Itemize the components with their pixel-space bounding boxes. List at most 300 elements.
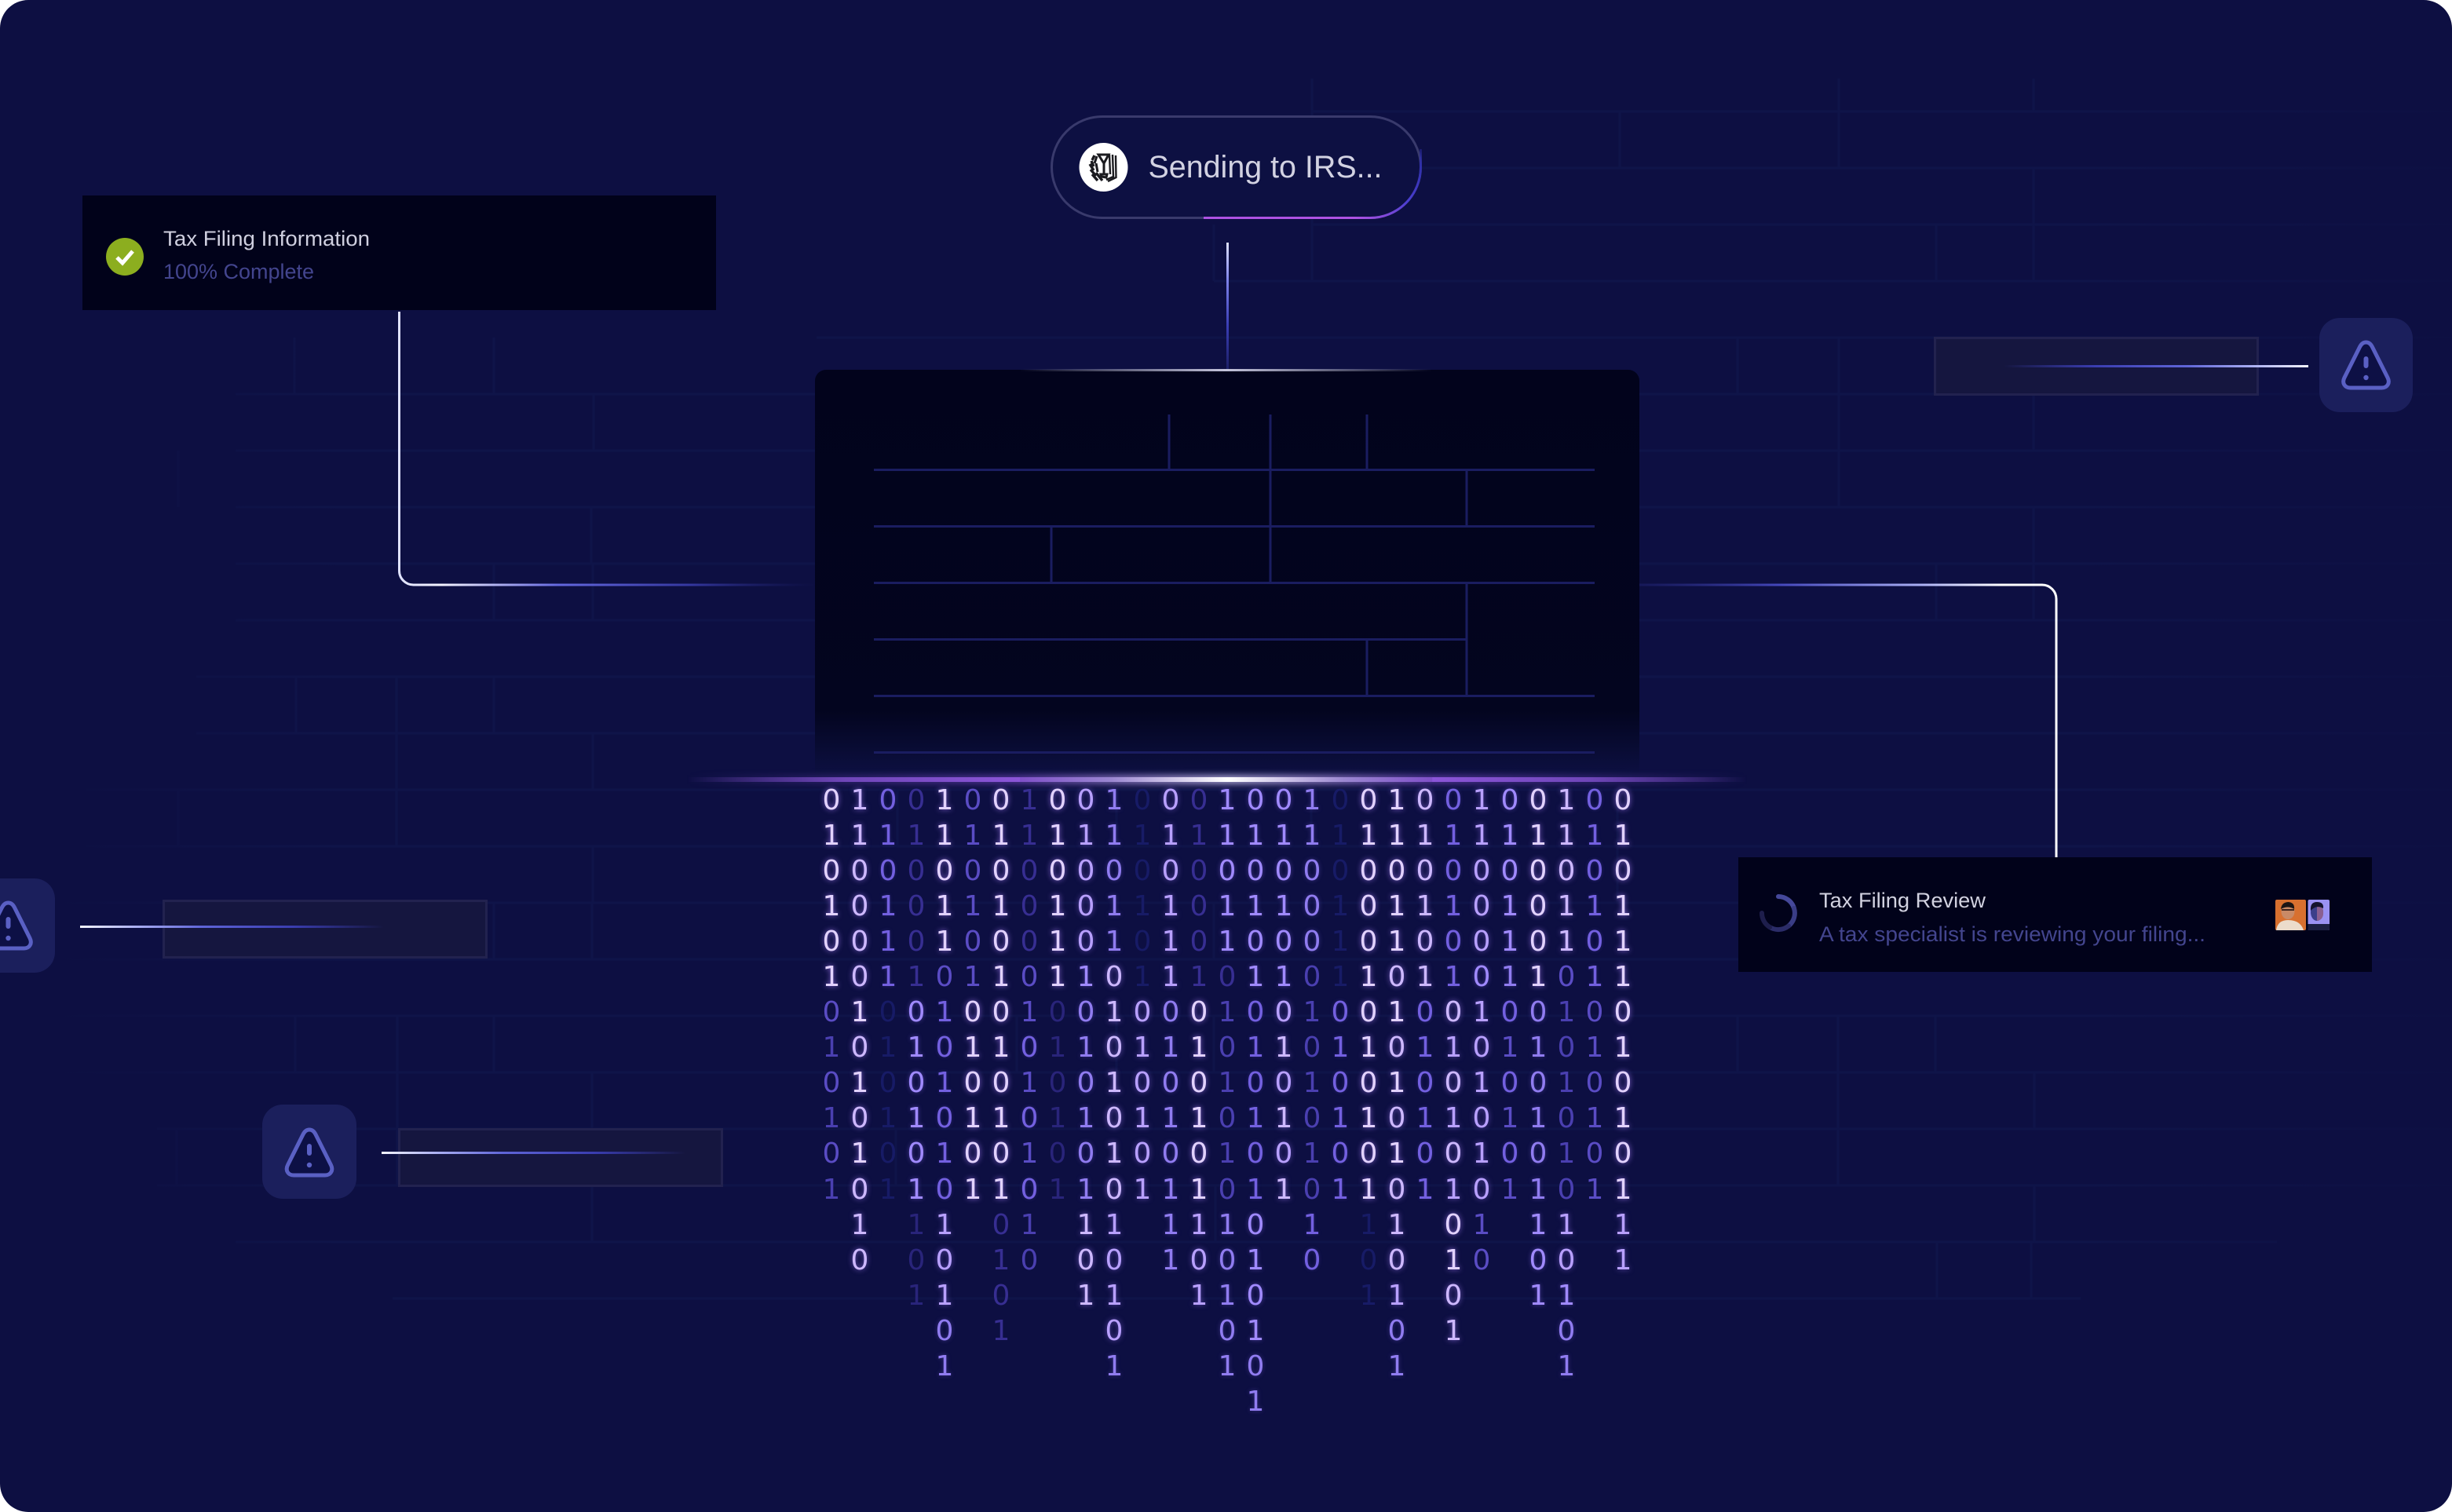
- binary data stream: 1: [1501, 1102, 1518, 1134]
- binary data stream: 0: [1501, 855, 1518, 887]
- binary data stream: 1: [1558, 1138, 1575, 1170]
- binary data stream: 0: [1190, 784, 1208, 816]
- binary data stream: 0: [1501, 784, 1518, 816]
- binary data stream: 0: [1219, 1315, 1236, 1347]
- binary data stream: 0: [1558, 1244, 1575, 1276]
- binary data stream: 0: [1529, 784, 1547, 816]
- binary data stream: 0: [936, 1032, 953, 1064]
- binary data stream: 1: [1049, 890, 1066, 922]
- binary data stream: 0: [992, 784, 1010, 816]
- binary data stream: 0: [1162, 784, 1179, 816]
- binary data stream: 0: [1360, 855, 1377, 887]
- binary data stream: 0: [936, 1174, 953, 1206]
- binary data stream: 1: [1445, 820, 1462, 852]
- binary data stream: 1: [1416, 890, 1434, 922]
- binary data stream: 1: [936, 1350, 953, 1382]
- card title: Tax Filing Review: [1819, 889, 1986, 912]
- binary data stream: 0: [1360, 784, 1377, 816]
- binary data stream: 0: [1190, 855, 1208, 887]
- binary data stream: 1: [823, 1174, 840, 1206]
- binary data stream: 0: [823, 855, 840, 887]
- binary data stream: 0: [1275, 1138, 1292, 1170]
- binary data stream: 0: [1021, 855, 1038, 887]
- binary data stream: 1: [1219, 996, 1236, 1028]
- binary data stream: 1: [936, 890, 953, 922]
- binary data stream: 1: [1558, 784, 1575, 816]
- binary data stream: 0: [851, 1244, 868, 1276]
- binary data stream: 1: [851, 820, 868, 852]
- binary data stream: 0: [1247, 996, 1264, 1028]
- binary data stream: 1: [1162, 820, 1179, 852]
- binary data stream: 0: [1416, 1067, 1434, 1099]
- connector: pill to panel: [1226, 243, 1229, 370]
- binary data stream: 0: [1190, 1244, 1208, 1276]
- binary data stream: 0: [1219, 961, 1236, 993]
- binary data stream: 1: [879, 890, 897, 922]
- binary data stream: 1: [908, 1032, 925, 1064]
- binary data stream: 0: [1473, 855, 1490, 887]
- binary data stream: 1: [1275, 1174, 1292, 1206]
- scanner bar: [687, 777, 1747, 782]
- binary data stream: [820, 784, 1634, 1418]
- binary data stream: 1: [1416, 1174, 1434, 1206]
- binary data stream: 1: [879, 1102, 897, 1134]
- binary data stream: 1: [1275, 1032, 1292, 1064]
- binary data stream: 0: [1416, 855, 1434, 887]
- binary data stream: 1: [936, 1138, 953, 1170]
- binary data stream: 0: [1332, 1138, 1349, 1170]
- binary data stream: 0: [908, 890, 925, 922]
- binary data stream: 0: [1105, 961, 1123, 993]
- binary data stream: 1: [1275, 890, 1292, 922]
- placeholder bar: left: [163, 900, 488, 959]
- binary data stream: 0: [1021, 890, 1038, 922]
- binary data stream: 1: [1360, 961, 1377, 993]
- binary data stream: 0: [1247, 1350, 1264, 1382]
- binary data stream: 0: [1247, 1138, 1264, 1170]
- binary data stream: 1: [908, 1280, 925, 1312]
- binary data stream: 1: [1388, 1138, 1405, 1170]
- binary data stream: 0: [1162, 996, 1179, 1028]
- binary data stream: 1: [1021, 784, 1038, 816]
- binary data stream: 0: [1105, 1032, 1123, 1064]
- binary data stream: 1: [1162, 1102, 1179, 1134]
- binary data stream: 0: [1134, 926, 1151, 958]
- binary data stream: 1: [1247, 1244, 1264, 1276]
- binary data stream: 1: [1105, 1067, 1123, 1099]
- binary data stream: 0: [851, 890, 868, 922]
- icon: spinner: [1762, 897, 1795, 929]
- binary data stream: 1: [936, 996, 953, 1028]
- binary data stream: 1: [1614, 890, 1632, 922]
- alert icon: lower left: [262, 1105, 356, 1199]
- binary data stream: 0: [1586, 855, 1603, 887]
- binary data stream: 0: [1134, 1067, 1151, 1099]
- binary data stream: 0: [992, 855, 1010, 887]
- binary data stream: 0: [1247, 926, 1264, 958]
- binary data stream: 0: [1219, 1174, 1236, 1206]
- binary data stream: 0: [1558, 855, 1575, 887]
- binary data stream: 1: [1134, 961, 1151, 993]
- binary data stream: 0: [1021, 1102, 1038, 1134]
- binary data stream: 1: [1360, 820, 1377, 852]
- alert line: right: [2004, 365, 2308, 367]
- binary data stream: 1: [964, 1102, 981, 1134]
- binary data stream: 0: [908, 1244, 925, 1276]
- binary data stream: 0: [936, 1244, 953, 1276]
- binary data stream: 1: [823, 1102, 840, 1134]
- binary data stream: 0: [1473, 890, 1490, 922]
- card: Tax Filing Review: [1738, 857, 2372, 972]
- binary data stream: 0: [851, 1102, 868, 1134]
- binary data stream: 0: [1445, 1067, 1462, 1099]
- binary data stream: 1: [992, 1174, 1010, 1206]
- binary data stream: 0: [964, 784, 981, 816]
- binary data stream: 1: [1219, 926, 1236, 958]
- binary data stream: 1: [1501, 1032, 1518, 1064]
- binary data stream: 1: [1332, 1174, 1349, 1206]
- binary data stream: 1: [1162, 926, 1179, 958]
- binary data stream: 0: [1162, 1138, 1179, 1170]
- binary data stream: 1: [1134, 1032, 1151, 1064]
- binary data stream: 1: [1614, 1209, 1632, 1241]
- binary data stream: 0: [1473, 1102, 1490, 1134]
- binary data stream: 0: [992, 1209, 1010, 1241]
- binary data stream: 1: [936, 926, 953, 958]
- binary data stream: 0: [1049, 996, 1066, 1028]
- binary data stream: 1: [1360, 1209, 1377, 1241]
- binary data stream: 1: [1445, 1244, 1462, 1276]
- binary data stream: 1: [1558, 1350, 1575, 1382]
- binary data stream: 0: [964, 926, 981, 958]
- binary data stream: 0: [1303, 1244, 1321, 1276]
- binary data stream: 1: [1021, 1138, 1038, 1170]
- binary data stream: 0: [1049, 1067, 1066, 1099]
- binary data stream: 1: [823, 890, 840, 922]
- binary data stream: 1: [1529, 961, 1547, 993]
- binary data stream: 1: [1388, 926, 1405, 958]
- binary data stream: 1: [851, 784, 868, 816]
- binary data stream: 0: [1614, 784, 1632, 816]
- binary data stream: 0: [1360, 1244, 1377, 1276]
- binary data stream: 0: [1077, 784, 1094, 816]
- binary data stream: 0: [1445, 855, 1462, 887]
- binary data stream: 0: [1360, 890, 1377, 922]
- binary data stream: 1: [1219, 890, 1236, 922]
- binary data stream: 1: [1501, 961, 1518, 993]
- binary data stream: 0: [1445, 1280, 1462, 1312]
- binary data stream: 1: [1303, 996, 1321, 1028]
- binary data stream: 1: [1416, 961, 1434, 993]
- binary data stream: 0: [1303, 1102, 1321, 1134]
- binary data stream: 1: [1332, 890, 1349, 922]
- binary data stream: 0: [936, 1102, 953, 1134]
- binary data stream: 1: [1247, 820, 1264, 852]
- binary data stream: 1: [1473, 820, 1490, 852]
- binary data stream: 0: [1388, 1244, 1405, 1276]
- binary data stream: 0: [908, 1138, 925, 1170]
- binary data stream: 1: [1473, 1067, 1490, 1099]
- binary data stream: 0: [1558, 1174, 1575, 1206]
- binary data stream: 1: [1049, 961, 1066, 993]
- binary data stream: 0: [1529, 890, 1547, 922]
- binary data stream: 0: [1473, 1032, 1490, 1064]
- binary data stream: 1: [1105, 1350, 1123, 1382]
- binary data stream: 1: [1388, 1067, 1405, 1099]
- binary data stream: 1: [1190, 820, 1208, 852]
- binary data stream: 0: [1473, 926, 1490, 958]
- binary data stream: 1: [1105, 996, 1123, 1028]
- binary data stream: 0: [1558, 1032, 1575, 1064]
- panel: encrypted document: [815, 370, 1639, 776]
- binary data stream: 0: [1360, 1067, 1377, 1099]
- binary data stream: 0: [964, 1067, 981, 1099]
- binary data stream: 0: [1473, 1174, 1490, 1206]
- binary data stream: 1: [908, 1174, 925, 1206]
- binary data stream: 1: [1247, 890, 1264, 922]
- binary data stream: 0: [1303, 926, 1321, 958]
- binary data stream: 1: [1247, 961, 1264, 993]
- binary data stream: 0: [908, 1067, 925, 1099]
- binary data stream: 1: [1558, 926, 1575, 958]
- binary data stream: 0: [1558, 1315, 1575, 1347]
- binary data stream: 0: [1021, 926, 1038, 958]
- binary data stream: 0: [936, 1315, 953, 1347]
- binary data stream: 1: [992, 1244, 1010, 1276]
- binary data stream: 1: [1021, 996, 1038, 1028]
- binary data stream: 0: [1416, 996, 1434, 1028]
- binary data stream: 0: [992, 1067, 1010, 1099]
- binary data stream: 0: [1529, 1138, 1547, 1170]
- alert line: lower left: [382, 1152, 685, 1154]
- binary data stream: 1: [1134, 1174, 1151, 1206]
- binary data stream: 0: [1190, 1138, 1208, 1170]
- binary data stream: 1: [879, 1174, 897, 1206]
- binary data stream: 1: [1416, 820, 1434, 852]
- binary data stream: 0: [1134, 855, 1151, 887]
- binary data stream: 1: [823, 820, 840, 852]
- binary data stream: 0: [1303, 1032, 1321, 1064]
- scanner bar glow: [687, 775, 1747, 784]
- binary data stream: 1: [936, 1209, 953, 1241]
- binary data stream: 0: [1021, 1032, 1038, 1064]
- binary data stream: 1: [1529, 1174, 1547, 1206]
- binary data stream: 0: [879, 1138, 897, 1170]
- binary data stream: 0: [1134, 996, 1151, 1028]
- binary data stream: 0: [1473, 961, 1490, 993]
- binary data stream: 0: [964, 855, 981, 887]
- binary data stream: 0: [879, 996, 897, 1028]
- binary data stream: 0: [1445, 1209, 1462, 1241]
- binary data stream: 0: [1247, 1209, 1264, 1241]
- binary data stream: 0: [1077, 1138, 1094, 1170]
- binary data stream: 1: [1049, 820, 1066, 852]
- binary data stream: 1: [1190, 1032, 1208, 1064]
- binary data stream: 1: [1529, 1032, 1547, 1064]
- binary data stream: 1: [1529, 1280, 1547, 1312]
- binary data stream: 0: [879, 784, 897, 816]
- binary data stream: 0: [1303, 890, 1321, 922]
- binary data stream: 1: [1473, 996, 1490, 1028]
- placeholder bar: lower left: [398, 1128, 723, 1187]
- binary data stream: 1: [1219, 1209, 1236, 1241]
- binary data stream: 1: [1332, 1102, 1349, 1134]
- binary data stream: 1: [1388, 1209, 1405, 1241]
- binary data stream: 1: [992, 961, 1010, 993]
- binary data stream: 1: [1105, 784, 1123, 816]
- binary data stream: 0: [851, 1174, 868, 1206]
- avatars: [2275, 900, 2330, 930]
- binary data stream: 1: [1077, 1032, 1094, 1064]
- binary data stream: 0: [1388, 1032, 1405, 1064]
- binary data stream: 1: [1558, 820, 1575, 852]
- binary data stream: 1: [1614, 926, 1632, 958]
- binary data stream: 0: [1134, 1138, 1151, 1170]
- binary data stream: 1: [936, 1280, 953, 1312]
- binary data stream: 1: [1388, 820, 1405, 852]
- binary data stream: 1: [1473, 784, 1490, 816]
- binary data stream: 1: [879, 1032, 897, 1064]
- binary data stream: 0: [823, 926, 840, 958]
- binary data stream: 1: [1445, 1102, 1462, 1134]
- binary data stream: 1: [1077, 961, 1094, 993]
- binary data stream: 1: [1445, 1174, 1462, 1206]
- binary data stream: 0: [1501, 1138, 1518, 1170]
- binary data stream: 1: [1303, 1209, 1321, 1241]
- binary data stream: 0: [1303, 1174, 1321, 1206]
- binary data stream: 0: [908, 926, 925, 958]
- binary data stream: 0: [1049, 784, 1066, 816]
- binary data stream: 1: [1049, 1102, 1066, 1134]
- binary data stream: 1: [1049, 926, 1066, 958]
- binary data stream: 0: [879, 1067, 897, 1099]
- binary data stream: 1: [1219, 1280, 1236, 1312]
- binary data stream: 0: [992, 926, 1010, 958]
- binary data stream: 1: [1501, 1174, 1518, 1206]
- binary data stream: 1: [1162, 890, 1179, 922]
- binary data stream: 1: [1219, 820, 1236, 852]
- binary data stream: 1: [1388, 996, 1405, 1028]
- binary data stream: 0: [1303, 855, 1321, 887]
- binary data stream: 0: [1077, 855, 1094, 887]
- binary data stream: 1: [1332, 1032, 1349, 1064]
- binary data stream: 1: [1077, 820, 1094, 852]
- card status: 100% Complete: [163, 260, 314, 283]
- binary data stream: 0: [1105, 1174, 1123, 1206]
- binary data stream: 0: [1529, 855, 1547, 887]
- binary data stream: 1: [1134, 1102, 1151, 1134]
- binary data stream: 1: [1529, 820, 1547, 852]
- binary data stream: 0: [1529, 926, 1547, 958]
- binary data stream: 1: [1303, 1138, 1321, 1170]
- binary data stream: 1: [1049, 1032, 1066, 1064]
- binary data stream: 0: [1332, 1067, 1349, 1099]
- binary data stream: 0: [1190, 890, 1208, 922]
- binary data stream: 1: [1473, 1209, 1490, 1241]
- binary data stream: 0: [1360, 926, 1377, 958]
- card title: Tax Filing Information: [163, 227, 370, 250]
- binary data stream: 1: [964, 890, 981, 922]
- binary data stream: 1: [1360, 1174, 1377, 1206]
- binary data stream: 1: [1275, 820, 1292, 852]
- binary data stream: 1: [1219, 1350, 1236, 1382]
- binary data stream: 0: [851, 1032, 868, 1064]
- binary data stream: 1: [1614, 1032, 1632, 1064]
- binary data stream: 0: [1105, 1102, 1123, 1134]
- binary data stream: 1: [851, 1138, 868, 1170]
- binary data stream: 0: [936, 961, 953, 993]
- binary data stream: 1: [1162, 1032, 1179, 1064]
- binary data stream: 1: [936, 784, 953, 816]
- binary data stream: 1: [1190, 1280, 1208, 1312]
- binary data stream: 0: [1077, 1067, 1094, 1099]
- binary data stream: 1: [851, 1067, 868, 1099]
- binary data stream: 1: [1105, 1138, 1123, 1170]
- binary data stream: 1: [1558, 890, 1575, 922]
- binary data stream: 0: [1247, 855, 1264, 887]
- binary data stream: 1: [1247, 1174, 1264, 1206]
- binary data stream: 0: [1077, 1244, 1094, 1276]
- binary data stream: 0: [1162, 1067, 1179, 1099]
- binary data stream: 1: [1021, 1209, 1038, 1241]
- binary data stream: 1: [1077, 1209, 1094, 1241]
- binary data stream: 1: [1190, 1209, 1208, 1241]
- binary data stream: 1: [1388, 784, 1405, 816]
- binary data stream: 1: [1501, 926, 1518, 958]
- binary data stream: 1: [1021, 1067, 1038, 1099]
- binary data stream: 1: [1021, 820, 1038, 852]
- binary data stream: 1: [1586, 1102, 1603, 1134]
- binary data stream: 1: [1360, 1102, 1377, 1134]
- binary data stream: 0: [1332, 996, 1349, 1028]
- binary data stream: 1: [1077, 1102, 1094, 1134]
- binary data stream: 1: [1303, 1067, 1321, 1099]
- card status: A tax specialist is reviewing your filing...: [1819, 922, 2205, 946]
- binary data stream: 0: [823, 996, 840, 1028]
- binary data stream: 1: [908, 820, 925, 852]
- binary data stream: 0: [1275, 1067, 1292, 1099]
- binary data stream: 0: [1275, 926, 1292, 958]
- binary data stream: 0: [1332, 855, 1349, 887]
- binary data stream: 1: [1416, 1032, 1434, 1064]
- binary data stream: 0: [879, 855, 897, 887]
- binary data stream: 1: [1303, 784, 1321, 816]
- binary data stream: 1: [992, 890, 1010, 922]
- binary data stream: 0: [1529, 996, 1547, 1028]
- binary data stream: 0: [823, 784, 840, 816]
- binary data stream: 0: [1077, 926, 1094, 958]
- binary data stream: 0: [1303, 961, 1321, 993]
- binary data stream: 0: [1219, 855, 1236, 887]
- binary data stream: 0: [936, 855, 953, 887]
- binary data stream: 0: [908, 784, 925, 816]
- binary data stream: 1: [1105, 820, 1123, 852]
- binary data stream: 1: [879, 961, 897, 993]
- binary data stream: 0: [1614, 1067, 1632, 1099]
- binary data stream: 1: [1445, 961, 1462, 993]
- binary data stream: 0: [1105, 1315, 1123, 1347]
- binary data stream: 1: [1247, 1315, 1264, 1347]
- binary data stream: 0: [851, 926, 868, 958]
- binary data stream: 0: [1049, 855, 1066, 887]
- binary data stream: 0: [1219, 1244, 1236, 1276]
- binary data stream: 0: [1529, 1067, 1547, 1099]
- binary data stream: 1: [1586, 961, 1603, 993]
- binary data stream: 1: [1388, 1280, 1405, 1312]
- binary data stream: 1: [964, 961, 981, 993]
- binary data stream: 1: [908, 1102, 925, 1134]
- binary data stream: 1: [992, 1102, 1010, 1134]
